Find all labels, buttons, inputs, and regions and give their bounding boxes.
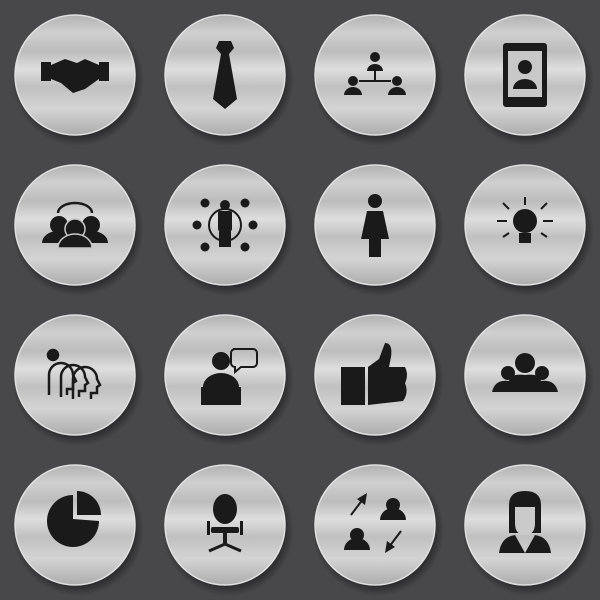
icon: network person bbox=[192, 198, 258, 252]
panel: tablet profile bbox=[462, 14, 594, 146]
panel: team bbox=[12, 164, 144, 296]
panel: thumbs up bbox=[312, 314, 444, 446]
icon: tie bbox=[213, 41, 237, 109]
icon: hierarchy bbox=[344, 52, 406, 95]
panel: businesswoman bbox=[462, 464, 594, 596]
panel: idea bulb bbox=[462, 164, 594, 296]
panel: handshake bbox=[12, 14, 144, 146]
panel: chair bbox=[162, 464, 294, 596]
icon: group bbox=[492, 353, 558, 392]
icon: user exchange bbox=[344, 493, 406, 553]
panel: group bbox=[462, 314, 594, 446]
icon: office chair bbox=[207, 494, 243, 551]
icon: handshake bbox=[41, 59, 109, 93]
panel: pie chart bbox=[12, 464, 144, 596]
icon: idea bulb bbox=[497, 197, 553, 243]
icon: speaker at podium bbox=[201, 349, 257, 405]
icon: businesswoman bbox=[499, 491, 551, 553]
icon: woman bbox=[361, 194, 389, 257]
icon: pie chart bbox=[47, 491, 101, 547]
panel: hierarchy bbox=[312, 14, 444, 146]
panel: idea heads bbox=[12, 314, 144, 446]
panel: exchange bbox=[312, 464, 444, 596]
panel: tie bbox=[162, 14, 294, 146]
panel: network person bbox=[162, 164, 294, 296]
icon: team bbox=[42, 203, 108, 248]
icon: tablet bbox=[503, 43, 547, 107]
panel: woman bbox=[312, 164, 444, 296]
icon: idea heads bbox=[48, 350, 100, 399]
icon: thumbs up bbox=[341, 343, 407, 405]
panel: speaker bbox=[162, 314, 294, 446]
